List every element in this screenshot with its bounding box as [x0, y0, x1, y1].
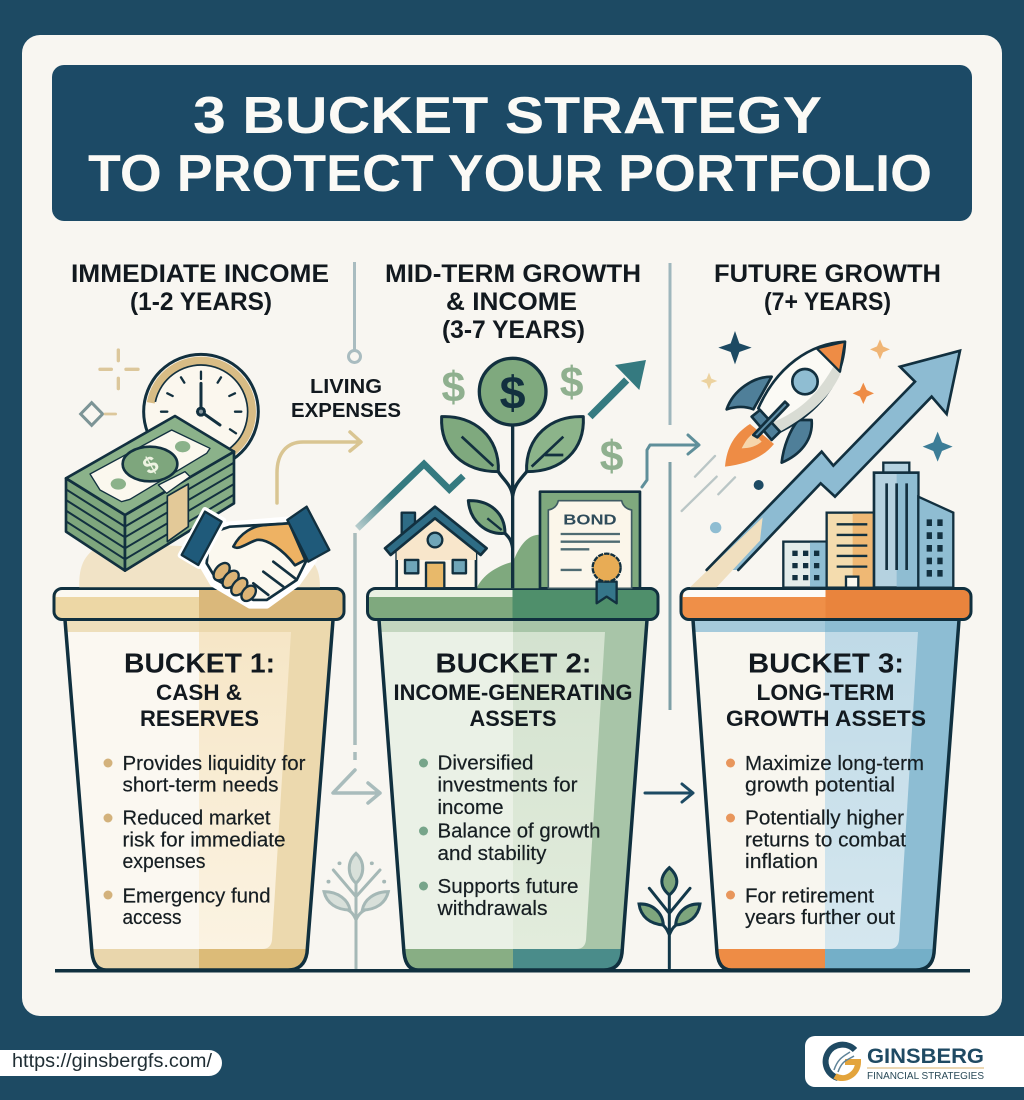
ground line — [55, 969, 970, 972]
arrow: large growth arrow — [690, 351, 960, 587]
bucket 2 outline — [379, 620, 647, 970]
bucket 2 bullets: investments for — [438, 774, 578, 796]
bucket 2 bullets: Supports future — [438, 876, 578, 898]
bucket 3 bullets: returns to combat — [745, 830, 906, 852]
bucket 1 bullets: expenses — [122, 851, 206, 873]
green hill — [477, 535, 542, 588]
bucket 3 heading: BUCKET 3: — [748, 648, 904, 678]
dollar signs — [441, 359, 624, 481]
icon: stack of money — [66, 416, 234, 571]
bucket 1 heading: RESERVES — [140, 706, 259, 731]
bucket 3 — [681, 588, 971, 970]
dollar signs: $ — [560, 359, 584, 407]
bucket 3 heading: GROWTH ASSETS — [726, 706, 926, 731]
bucket 1 heading: BUCKET 1: — [124, 648, 275, 678]
dollar signs: $ — [441, 364, 465, 412]
heading: mid-term growth: MID-TERM GROWTH — [385, 260, 641, 288]
heading: future growth: FUTURE GROWTH — [714, 260, 941, 288]
hill behind cash — [79, 543, 320, 587]
bucket 2 rim — [368, 588, 658, 620]
heading: immediate income: IMMEDIATE INCOME — [71, 260, 329, 288]
logo: Ginsberg Financial Strategies: GINSBERG — [867, 1044, 984, 1068]
bucket 2 — [368, 588, 658, 970]
arrow: lower light arrow — [333, 770, 380, 803]
title banner: TO PROTECT YOUR PORTFOLIO — [88, 145, 932, 203]
logo: Ginsberg Financial Strategies — [805, 1036, 1024, 1087]
heading: mid-term growth: (3-7 YEARS) — [442, 316, 585, 344]
bucket 1 bullets: risk for immediate — [122, 830, 286, 852]
bucket 3 rim — [681, 588, 971, 620]
bucket 1 body — [60, 620, 340, 970]
title banner — [52, 65, 972, 221]
bucket 1 rim — [54, 588, 344, 620]
speed lines and dots — [682, 456, 764, 533]
arrow: lower dark arrow — [645, 784, 693, 802]
star decorations — [701, 331, 953, 462]
heading: future growth: (7+ YEARS) — [764, 288, 891, 316]
bucket 3 bullets: Potentially higher — [745, 808, 904, 830]
connector: divider with node — [348, 262, 360, 362]
bucket 3 bullets: Maximize long-term — [745, 753, 924, 775]
title banner: 3 BUCKET STRATEGY — [193, 87, 822, 145]
label: living expenses: EXPENSES — [291, 400, 401, 422]
dollar signs: $ — [600, 433, 624, 481]
bucket 1 bullets: Emergency fund — [122, 886, 270, 908]
bucket 2 heading: ASSETS — [470, 706, 556, 731]
bucket 3 heading: LONG-TERM — [756, 680, 894, 705]
bucket 1 heading: CASH & — [156, 680, 242, 705]
icon: dark plant — [639, 868, 700, 968]
bucket 1 bullets — [104, 753, 306, 929]
icon: bond certificate: BOND — [563, 512, 617, 528]
icon: rocket — [725, 342, 845, 467]
bucket 1 bullets: access — [122, 907, 182, 929]
illustration: cash, clock and handshake — [66, 350, 329, 605]
bucket 1 — [54, 588, 344, 970]
bucket 3 bullets: growth potential — [745, 774, 895, 796]
bucket 1 bullets: short-term needs — [122, 774, 278, 796]
arrow: teal growth — [590, 360, 646, 417]
illustration: plant, house and bond — [357, 358, 646, 603]
heading: mid-term growth — [385, 260, 641, 344]
heading: future growth — [714, 260, 941, 316]
bucket 3 bullets: For retirement — [745, 886, 874, 908]
arrow: living expenses flow — [277, 432, 361, 503]
heading: mid-term growth: & INCOME — [446, 288, 577, 316]
bucket 2 bullets: Balance of growth — [438, 820, 600, 842]
bucket 2 bullets — [419, 752, 600, 920]
icon: city buildings — [783, 463, 953, 588]
heading: immediate income — [71, 260, 329, 316]
bucket 1 bullets: Reduced market — [122, 808, 271, 830]
bucket 3 bullets: inflation — [745, 851, 818, 873]
heading: immediate income: (1-2 YEARS) — [130, 288, 272, 316]
connector: left lower divider — [353, 533, 357, 760]
bucket 3 outline — [693, 620, 959, 970]
illustration: rocket, arrow and city — [682, 331, 960, 588]
arrow: connector to future growth — [642, 435, 699, 487]
icon: bond certificate — [540, 492, 640, 603]
bucket 2 bullets: and stability — [438, 843, 546, 865]
bucket 2 bullets: withdrawals — [436, 898, 548, 920]
bucket 1 heading — [124, 648, 275, 731]
bucket 3 body — [688, 620, 964, 970]
icon: plant with coin: $ — [500, 366, 526, 418]
icon: light plant — [324, 853, 388, 968]
sparkle and diamond decoration — [81, 350, 138, 425]
bucket 1 outline — [65, 620, 333, 970]
website pill — [0, 1050, 222, 1076]
website pill: https://ginsbergfs.com/ — [12, 1051, 213, 1072]
bucket 3 bullets — [726, 753, 924, 929]
icon: plant with coin — [442, 358, 583, 588]
bucket 2 heading: INCOME-GENERATING — [394, 680, 632, 705]
bucket 2 body — [375, 620, 655, 970]
icon: logo mark — [826, 1045, 858, 1078]
icon: handshake — [181, 507, 329, 605]
bucket 3 bullets: years further out — [745, 907, 895, 929]
bucket 2 bullets: Diversified — [438, 752, 534, 774]
bucket 2 heading — [394, 648, 632, 731]
bucket 2 heading: BUCKET 2: — [436, 648, 592, 678]
bucket 2 bullets: income — [438, 797, 504, 819]
bucket 1 bullets: Provides liquidity for — [122, 753, 306, 775]
chart line rising behind house — [357, 464, 463, 528]
label: living expenses — [291, 376, 401, 422]
icon: house — [385, 507, 487, 588]
bucket 3 heading — [726, 648, 926, 731]
logo: Ginsberg Financial Strategies: FINANCIAL STRATEGIES — [867, 1070, 984, 1082]
label: living expenses: LIVING — [310, 376, 382, 398]
icon: clock — [142, 353, 260, 471]
icon: stack of money: $ — [138, 451, 163, 481]
connector: divider two lower — [668, 462, 672, 710]
connector: divider two top — [668, 263, 672, 425]
